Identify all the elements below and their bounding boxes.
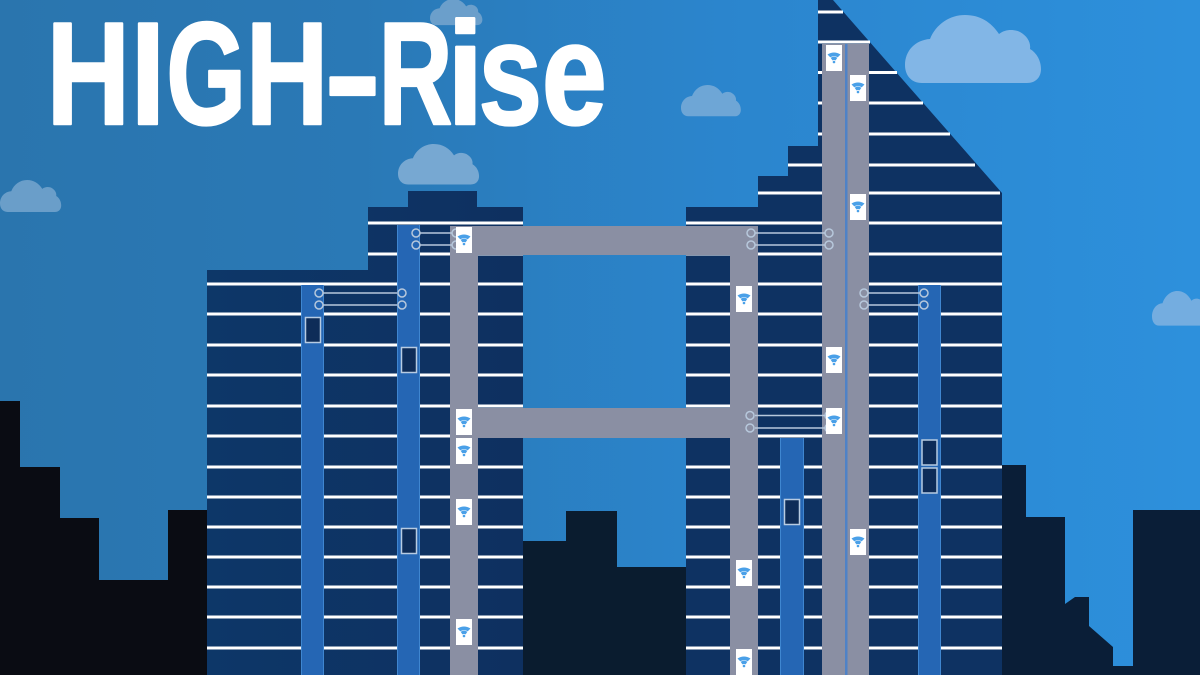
connector: tower link 5 [860,289,928,309]
connector: tower link 2 [412,229,460,249]
cloud: far left [0,180,61,212]
connector: tower link 1 [315,289,406,309]
cloud: above left tower [398,144,479,185]
elevator cars [306,318,937,554]
silhouette: left dark buildings [0,401,207,675]
floor lines: right tower [686,12,1002,648]
silhouette: centre dark buildings [523,511,686,675]
cloud: large top right [905,15,1041,83]
cloud: far right [1152,291,1200,326]
elevator shaft: blue 1 [301,285,324,675]
cloud: small centre [681,85,741,116]
elevator shaft: blue 4 [918,285,941,675]
wifi tiles [456,45,866,675]
building: right tower [686,0,1002,675]
building: left tower [207,191,523,675]
gray shafts and skybridges [450,44,869,675]
connector: tower link 4 [746,412,833,432]
cloud: behind title [430,0,482,25]
elevator shaft: blue 3 [780,438,804,675]
elevator shaft: blue 2 [397,225,420,675]
floor lines: left tower [207,223,523,648]
connector: tower link 3 [747,229,833,249]
silhouette: right dark buildings [1002,465,1200,675]
